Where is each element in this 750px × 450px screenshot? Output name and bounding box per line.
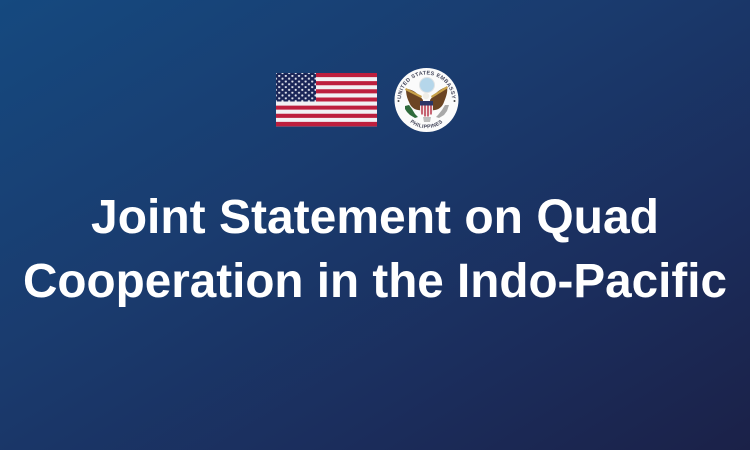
icon: embassy seal: UNITED STATES EMBASSY <box>397 70 456 99</box>
olive branch <box>405 105 418 118</box>
seal lettering bottom <box>405 116 448 128</box>
title line 1: Joint Statement on Quad <box>91 191 659 244</box>
shield <box>420 101 433 116</box>
eagle head <box>423 93 429 99</box>
seal lettering top <box>401 75 452 100</box>
arrows <box>436 105 449 118</box>
icon: US flag <box>276 73 377 126</box>
title line 2: Cooperation in the Indo-Pacific <box>23 255 727 308</box>
tail <box>423 117 431 122</box>
eagle wings <box>406 89 423 110</box>
title <box>23 191 727 308</box>
icon: embassy seal: PHILIPPINES <box>410 120 442 128</box>
seal sky medallion <box>420 78 434 92</box>
icon: embassy seal <box>394 68 458 132</box>
